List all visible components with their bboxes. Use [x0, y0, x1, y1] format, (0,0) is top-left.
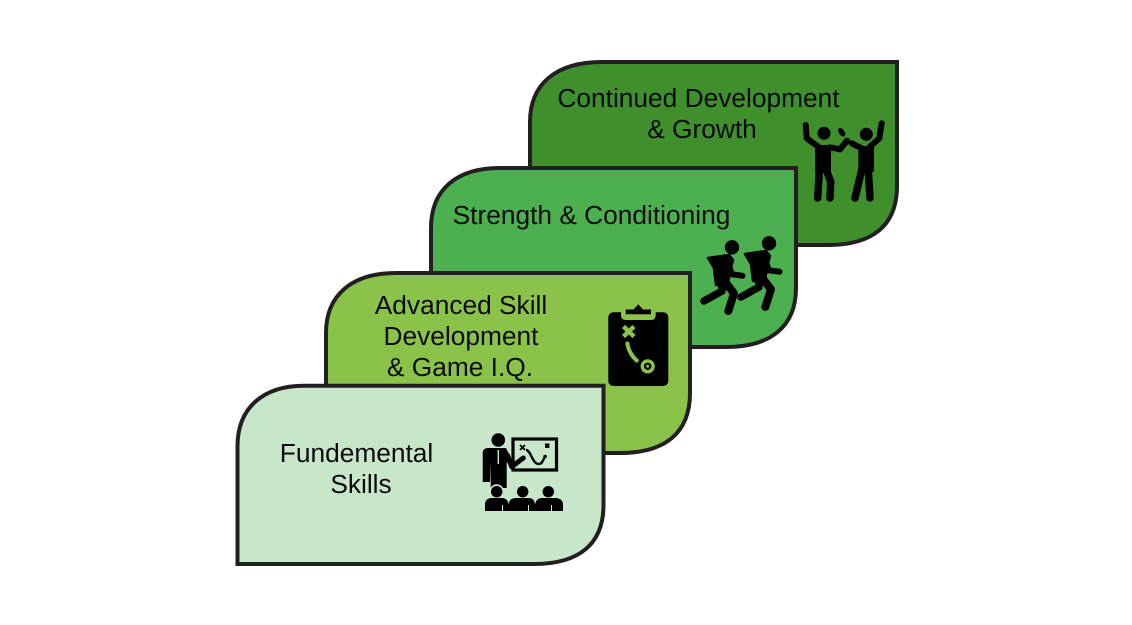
icon: clipboard play — [608, 304, 668, 386]
icon: celebrating players — [806, 123, 882, 198]
panel: advanced skill development — [326, 273, 690, 453]
panel: fundamental skills — [238, 386, 604, 564]
heading: game iq: & Game I.Q. — [387, 352, 533, 382]
heading: and growth: & Growth — [647, 114, 757, 144]
panel: continued development and growth — [530, 62, 897, 245]
heading: fundemental: Fundemental — [280, 438, 433, 468]
icon: coach and team at whiteboard — [483, 433, 563, 511]
icon: running players — [704, 236, 780, 311]
heading: continued development: Continued Development — [557, 83, 840, 113]
panel: strength and conditioning — [431, 168, 796, 347]
heading: development: Development — [384, 321, 539, 351]
heading: skills: Skills — [330, 469, 392, 499]
heading: advanced skill: Advanced Skill — [375, 290, 547, 320]
heading: strength and conditioning: Strength & Conditioning — [453, 200, 730, 230]
